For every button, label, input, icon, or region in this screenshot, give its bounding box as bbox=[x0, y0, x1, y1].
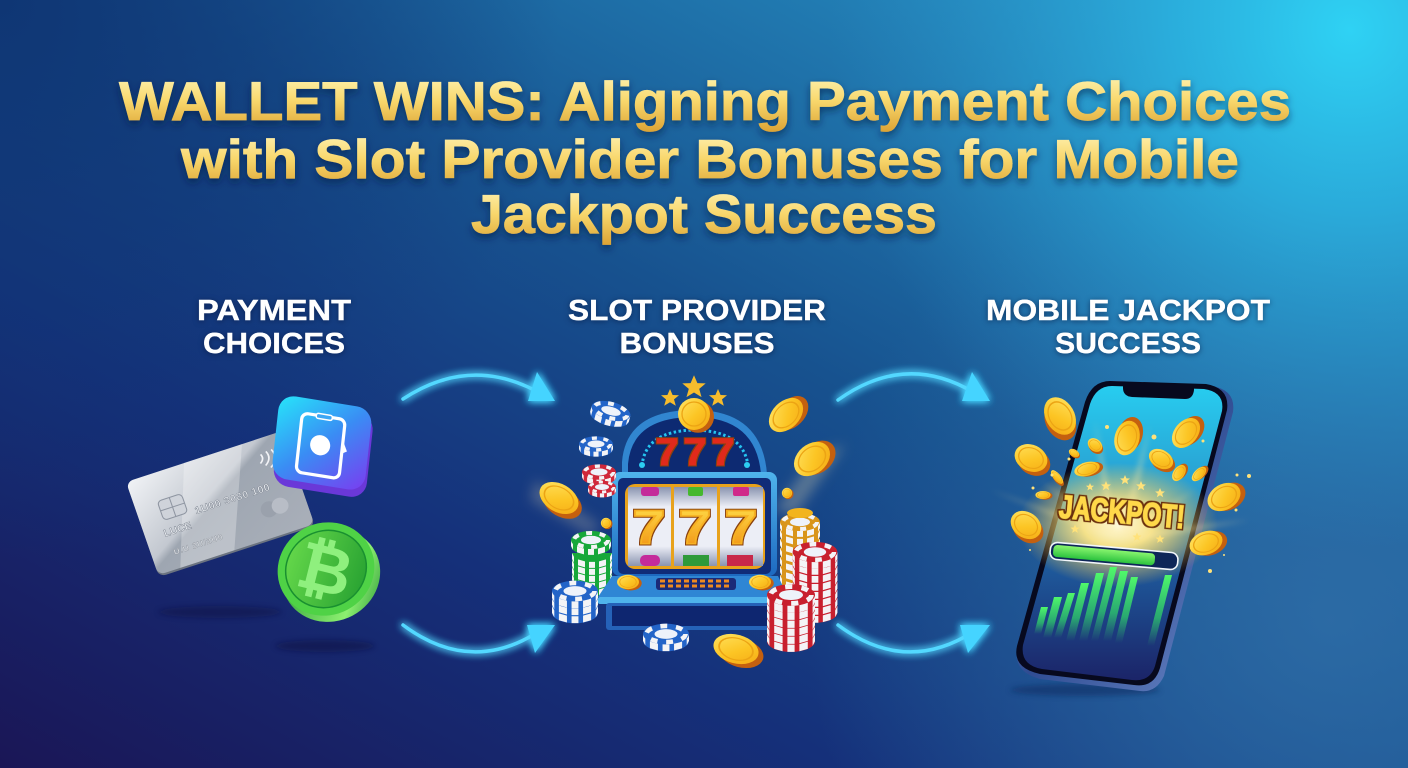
heading: payment choices: PAYMENT bbox=[197, 295, 351, 327]
text: 777 sign: 7 bbox=[712, 432, 734, 474]
slot machine bbox=[598, 410, 788, 630]
icon: credit card: LUCE bbox=[163, 521, 193, 540]
arrow: bonuses to jackpot (top) bbox=[838, 372, 990, 401]
text: jackpot: JACKPOT! bbox=[1058, 489, 1186, 535]
sparkles bbox=[1029, 425, 1251, 573]
icon: mobile wallet app bbox=[270, 394, 375, 499]
chip stack: red back bbox=[793, 542, 837, 623]
heading: slot provider bonuses: BONUSES bbox=[620, 328, 774, 360]
phone bezel bbox=[1016, 381, 1227, 685]
panel: mobile jackpot phone bbox=[990, 381, 1251, 696]
phone body bbox=[1016, 381, 1233, 691]
title bbox=[119, 70, 1291, 245]
phone screen bbox=[1023, 386, 1222, 680]
stars bbox=[661, 375, 727, 406]
arrow: payment to bonuses (bottom) bbox=[403, 625, 555, 653]
title: Jackpot Success bbox=[471, 183, 937, 245]
chip stack: gold bbox=[780, 508, 820, 590]
chip stack: blue bbox=[552, 581, 598, 623]
text: 777 sign: 7 bbox=[684, 432, 706, 474]
icon: credit card: 1U00 3080 100 bbox=[194, 482, 272, 517]
light streaks bbox=[530, 445, 845, 535]
chip stack: red front bbox=[767, 584, 815, 652]
title: with Slot Provider Bonuses for Mobile bbox=[180, 128, 1239, 190]
text: reel sevens: 7 bbox=[678, 502, 712, 555]
bar chart bbox=[1034, 567, 1172, 646]
heading: mobile jackpot success bbox=[986, 295, 1270, 360]
panel: payment choices icons bbox=[126, 394, 397, 652]
heading: slot provider bonuses: SLOT PROVIDER bbox=[568, 295, 826, 327]
phone notch bbox=[1123, 385, 1194, 399]
heading: mobile jackpot success: SUCCESS bbox=[1055, 328, 1201, 360]
coins bbox=[533, 388, 842, 673]
text: reel sevens: 7 bbox=[632, 502, 666, 555]
icon: bitcoin coin: ₿ bbox=[290, 526, 361, 613]
chip stack: green bbox=[571, 531, 612, 596]
text: reel sevens: 7 bbox=[724, 502, 758, 555]
arrow: bonuses to jackpot (bottom) bbox=[838, 625, 990, 653]
icon: credit card: U.U 2U/2U0 bbox=[172, 532, 224, 557]
title: WALLET WINS: Aligning Payment Choices bbox=[119, 70, 1291, 132]
heading: slot provider bonuses bbox=[568, 295, 826, 360]
jackpot burst bbox=[990, 420, 1250, 587]
panel: slot provider bonuses illustration bbox=[530, 375, 845, 673]
progress bar bbox=[1050, 542, 1178, 570]
icon: bitcoin coin bbox=[261, 505, 397, 639]
arrow: payment to bonuses (top) bbox=[403, 372, 555, 401]
icon: credit card bbox=[126, 431, 315, 577]
heading: mobile jackpot success: MOBILE JACKPOT bbox=[986, 295, 1270, 327]
heading: payment choices bbox=[197, 295, 351, 360]
coins burst bbox=[1004, 391, 1251, 562]
text: 777 sign: 7 bbox=[656, 432, 678, 474]
text: 777 sign bbox=[656, 432, 734, 474]
loose chips bbox=[579, 397, 689, 651]
text: reel sevens bbox=[632, 502, 758, 555]
heading: payment choices: CHOICES bbox=[203, 328, 345, 360]
